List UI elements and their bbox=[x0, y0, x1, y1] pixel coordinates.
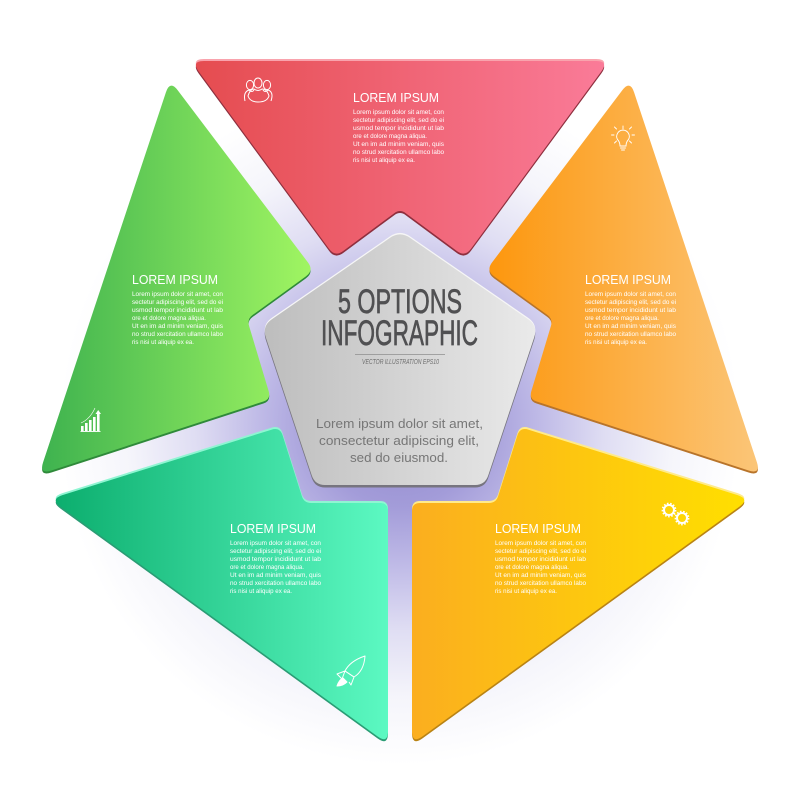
text block: teal: Ut en im ad minim veniam, quis bbox=[230, 572, 322, 579]
subtitle: VECTOR ILLUSTRATION EPS10 bbox=[362, 359, 439, 366]
text block: yellow: Lorem ipsum dolor sit amet, con bbox=[495, 540, 586, 547]
text block: yellow: LOREM IPSUM bbox=[495, 522, 581, 536]
icon: growth chart bbox=[80, 408, 101, 432]
text block: red: LOREM IPSUM bbox=[353, 91, 439, 105]
text block: orange: sectetur adipiscing elit, sed do ei bbox=[585, 299, 676, 306]
text block: yellow: ore et dolore magna aliqua. bbox=[495, 564, 569, 571]
text block: teal: sectetur adipiscing elit, sed do ei bbox=[230, 548, 321, 555]
text block: green: Ut en im ad minim veniam, quis bbox=[132, 323, 224, 330]
text block: yellow bbox=[495, 522, 587, 595]
panel: orange right option bbox=[489, 86, 758, 473]
panel: yellow lower-right option bbox=[412, 427, 744, 741]
panel: green left option bbox=[42, 86, 311, 473]
text block: green: LOREM IPSUM bbox=[132, 273, 218, 287]
text block: green: no strud xercitation ullamco labo bbox=[132, 331, 223, 338]
description text: sed do eiusmod. bbox=[350, 450, 448, 465]
description text bbox=[316, 416, 483, 465]
icon: rocket bbox=[337, 656, 365, 686]
text block: yellow: ris nisi ut aliquip ex ea. bbox=[495, 588, 557, 595]
text block: green: usmod tempor incididunt ut lab bbox=[132, 307, 223, 314]
text block: yellow: sectetur adipiscing elit, sed do ei bbox=[495, 548, 586, 555]
text block: orange: no strud xercitation ullamco labo bbox=[585, 331, 676, 338]
text block: green: ore et dolore magna aliqua. bbox=[132, 315, 206, 322]
text block: teal: ore et dolore magna aliqua. bbox=[230, 564, 304, 571]
text block: orange: Lorem ipsum dolor sit amet, con bbox=[585, 291, 676, 298]
description text: Lorem ipsum dolor sit amet, bbox=[316, 416, 483, 431]
title bbox=[321, 283, 478, 353]
text block: orange: Ut en im ad minim veniam, quis bbox=[585, 323, 677, 330]
text block: green bbox=[132, 273, 224, 346]
text block: orange bbox=[585, 273, 677, 346]
description text: consectetur adipiscing elit, bbox=[319, 433, 479, 448]
text block: yellow: usmod tempor incididunt ut lab bbox=[495, 556, 586, 563]
title: INFOGRAPHIC bbox=[321, 314, 478, 353]
text block: red: no strud xercitation ullamco labo bbox=[353, 149, 444, 156]
icon: gears bbox=[662, 503, 689, 525]
text block: teal: ris nisi ut aliquip ex ea. bbox=[230, 588, 292, 595]
subtitle bbox=[355, 354, 445, 366]
text block: red: Ut en im ad minim veniam, quis bbox=[353, 141, 445, 148]
panel: centre pentagon bbox=[265, 233, 535, 488]
text block: green: ris nisi ut aliquip ex ea. bbox=[132, 339, 194, 346]
text block: red: sectetur adipiscing elit, sed do ei bbox=[353, 117, 444, 124]
text block: yellow: Ut en im ad minim veniam, quis bbox=[495, 572, 587, 579]
text block: teal: Lorem ipsum dolor sit amet, con bbox=[230, 540, 321, 547]
icon: people bbox=[244, 78, 272, 102]
icon: light bulb bbox=[612, 126, 634, 150]
text block: teal: LOREM IPSUM bbox=[230, 522, 316, 536]
text block: red bbox=[353, 91, 445, 164]
text block: red: ore et dolore magna aliqua. bbox=[353, 133, 427, 140]
panel: teal lower-left option bbox=[56, 427, 388, 741]
text block: red: usmod tempor incididunt ut lab bbox=[353, 125, 444, 132]
text block: green: Lorem ipsum dolor sit amet, con bbox=[132, 291, 223, 298]
text block: orange: ris nisi ut aliquip ex ea. bbox=[585, 339, 647, 346]
text block: teal: usmod tempor incididunt ut lab bbox=[230, 556, 321, 563]
panel: red top option bbox=[196, 59, 604, 256]
text block: teal: no strud xercitation ullamco labo bbox=[230, 580, 321, 587]
title: 5 OPTIONS bbox=[338, 283, 462, 321]
text block: orange: LOREM IPSUM bbox=[585, 273, 671, 287]
text block: orange: ore et dolore magna aliqua. bbox=[585, 315, 659, 322]
text block: red: Lorem ipsum dolor sit amet, con bbox=[353, 109, 444, 116]
text block: yellow: no strud xercitation ullamco labo bbox=[495, 580, 586, 587]
text block: red: ris nisi ut aliquip ex ea. bbox=[353, 157, 415, 164]
text block: teal bbox=[230, 522, 322, 595]
text block: orange: usmod tempor incididunt ut lab bbox=[585, 307, 676, 314]
text block: green: sectetur adipiscing elit, sed do ei bbox=[132, 299, 223, 306]
